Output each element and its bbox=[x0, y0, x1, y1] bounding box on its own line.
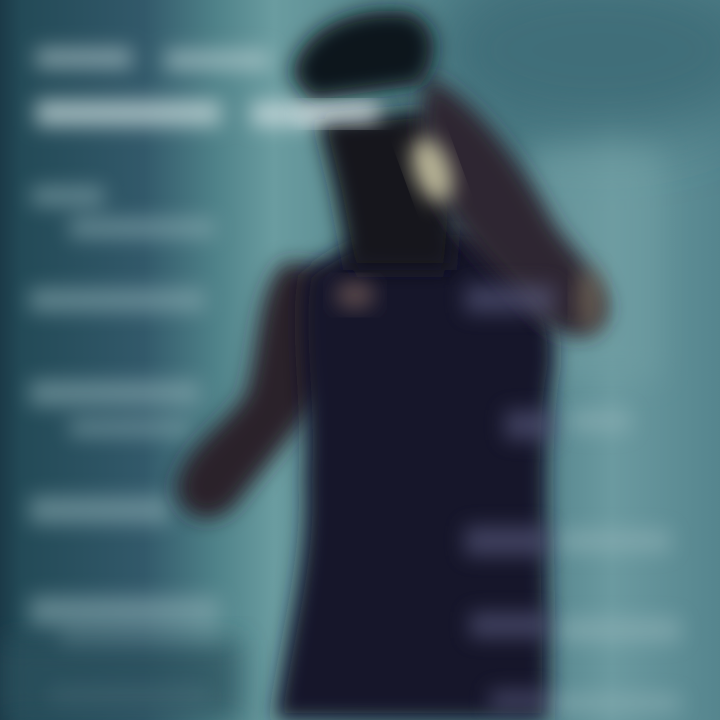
heading bbox=[36, 48, 377, 126]
left text column: smudged heading and text blocks bbox=[30, 48, 377, 702]
hair bbox=[292, 11, 434, 100]
headband highlight bbox=[300, 104, 378, 124]
torso bbox=[275, 227, 555, 720]
neck and face bbox=[318, 110, 455, 270]
hand highlight bbox=[403, 132, 461, 208]
right text column: smudged text on figure and background bbox=[465, 285, 680, 711]
shoulder highlight bbox=[335, 281, 375, 309]
figure bbox=[176, 11, 607, 720]
raised arm bbox=[420, 75, 607, 336]
text blocks bbox=[30, 186, 220, 702]
left arm bbox=[176, 262, 345, 519]
